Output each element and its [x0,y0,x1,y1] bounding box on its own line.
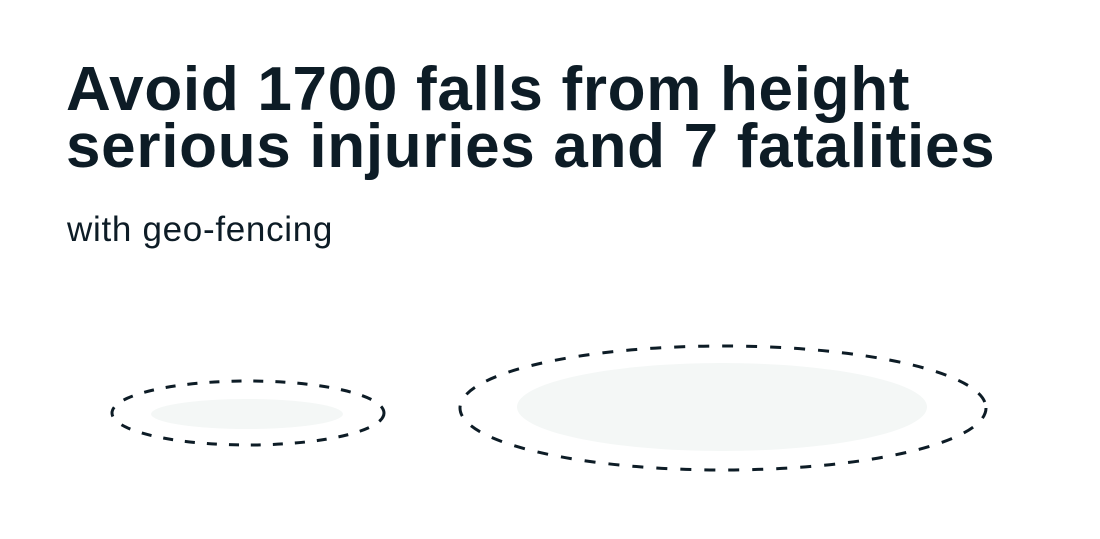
large geo-fence zone [460,346,986,470]
subtitle: with geo-fencing [67,210,333,249]
small geo-fence zone [112,381,384,445]
title: Avoid 1700 falls from height [66,55,910,124]
title [66,55,995,181]
title: serious injuries and 7 fatalities [66,112,995,181]
